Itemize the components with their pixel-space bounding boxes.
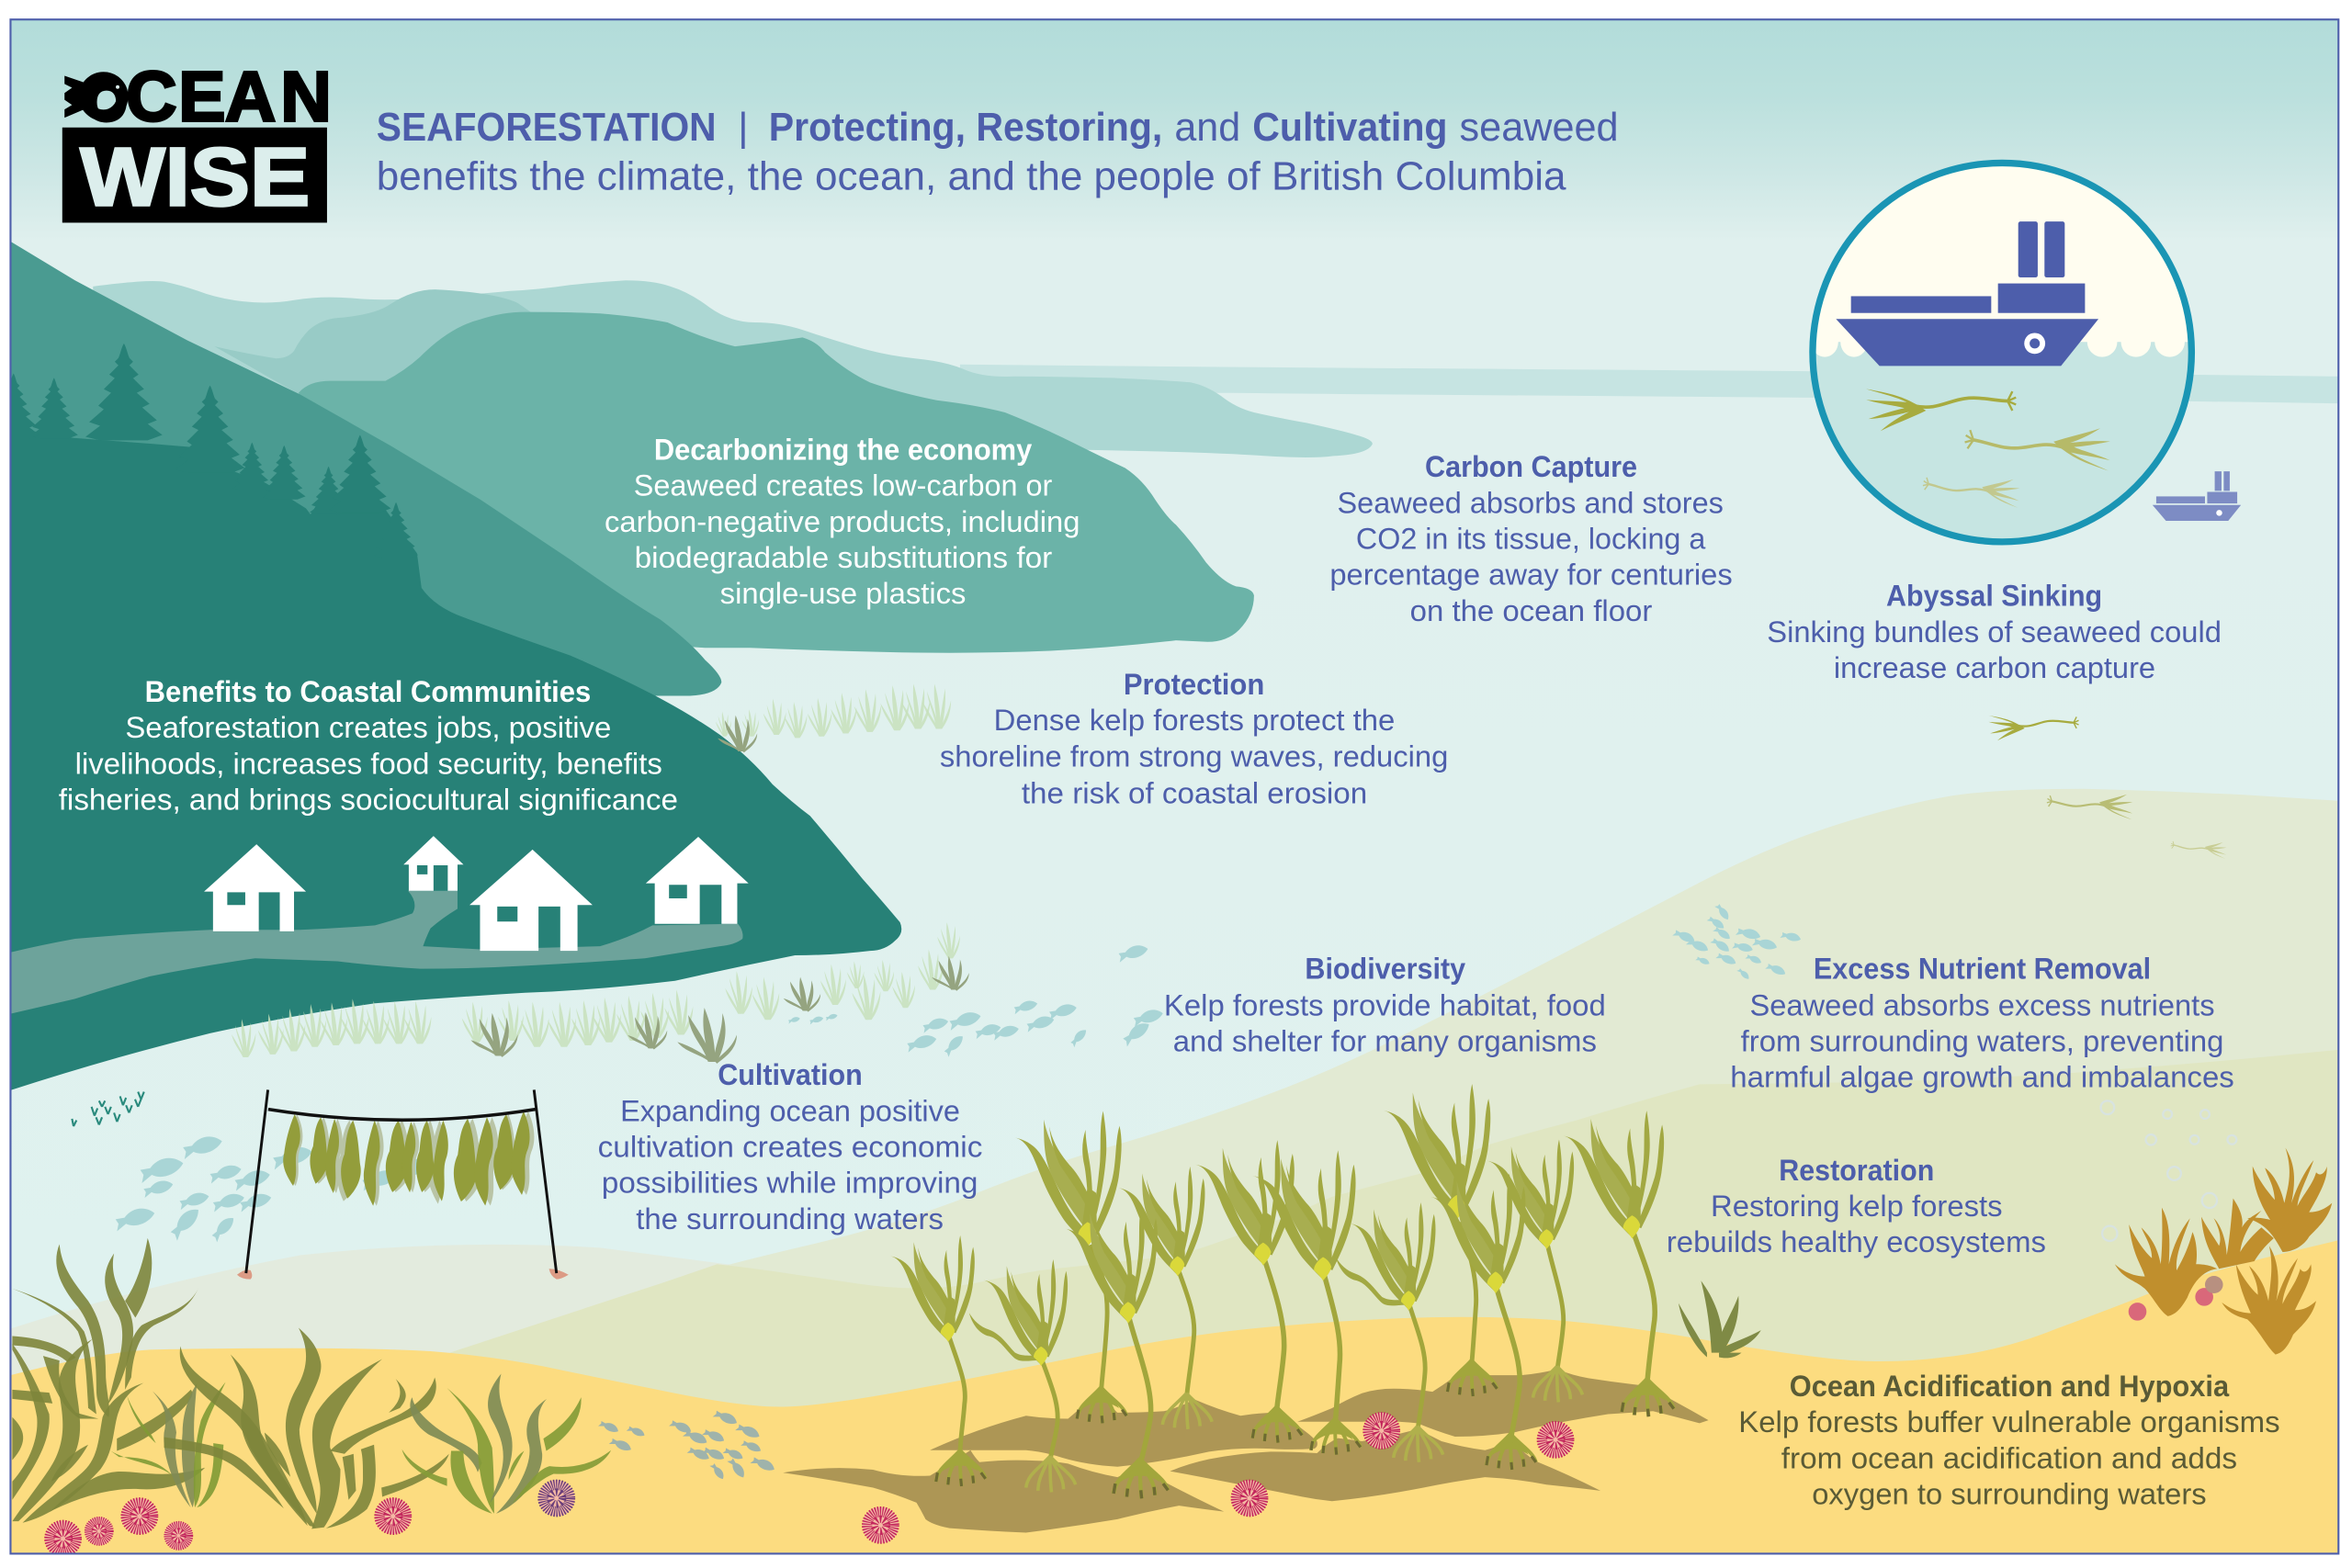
golden-brown seaweed cluster [2115,1148,2332,1355]
text: Protection: Dense kelp forests protect the [994,704,1395,737]
text: Abyssal Sinking: Abyssal Sinking [1886,580,2102,613]
distant water band [960,365,2338,403]
fish school near excess nutrient removal [1672,902,1802,982]
front kelp row [890,1111,1674,1498]
title: Cultivating [1252,106,1448,150]
abyssal sinking lens [1800,163,2205,552]
seaweed cultivation long line [237,1089,569,1280]
logo word OCEAN: OCEAN [85,59,332,137]
pale seabed hill [11,1245,729,1375]
left mid-tone mountain [10,242,721,705]
logo box WISE: WISE [80,132,310,224]
house two [403,836,464,891]
text: Benefits to Coastal Communities [59,675,678,817]
text: Abyssal Sinking: increase carbon capture [1834,651,2155,684]
back kelp row [1014,1084,1582,1429]
title: | [738,106,749,150]
right eelgrass clump [401,1373,611,1514]
text: Biodiversity: Kelp forests provide habitat, food [1164,988,1606,1021]
title: seaweed [1460,106,1619,150]
fish school near cultivation line [116,1136,429,1243]
text: Restoration [1667,1154,2046,1258]
text: Decarbonizing the economy: Decarbonizing the economy [654,433,1032,466]
large eelgrass clump [164,1328,449,1529]
house one [204,844,306,931]
dark green foreground shore [0,344,901,1090]
title: benefits the climate, the ocean, and the people of British Columbia [377,155,1566,199]
grey-green algae tufts [470,716,969,1064]
text: Excess Nutrient Removal: harmful algae growth and imbalances [1730,1061,2234,1094]
text: Cultivation: cultivation creates economic [598,1131,982,1164]
logo fish ring and tail [64,75,122,118]
text: Excess Nutrient Removal: Seaweed absorbs excess nutrients [1749,988,2215,1021]
small green eelgrass clump [111,1382,226,1507]
text: Restoration: Restoration [1779,1154,1934,1187]
kelp forest [890,1084,1674,1498]
tiny teal sprouts [72,1092,144,1126]
text: Biodiversity: Biodiversity [1305,952,1465,985]
text: Biodiversity: and shelter for many organisms [1173,1024,1597,1057]
fish school over sand [598,1411,775,1479]
text: Restoration: Restoring kelp forests [1711,1190,2003,1223]
text: Cultivation: Expanding ocean positive [620,1094,960,1127]
text: Decarbonizing the economy: biodegradable substitutions for [635,541,1053,574]
title: and [1174,106,1240,150]
sandy sea floor [10,1240,2338,1553]
eelgrass meadow left [12,1238,611,1529]
small reef urchins [2129,1276,2223,1321]
text: Cultivation [598,1058,982,1235]
text: Ocean Acidification and Hypoxia [1738,1370,2280,1511]
text: Benefits to Coastal Communities: Seaforestation creates jobs, positive [125,711,611,744]
house four [646,837,749,924]
text: Excess Nutrient Removal [1730,952,2234,1094]
text: Decarbonizing the economy: carbon-negative products, including [605,505,1080,538]
text: Biodiversity [1164,952,1606,1057]
houses [204,836,749,951]
title [377,106,1619,199]
text: Ocean Acidification and Hypoxia: Kelp forests buffer vulnerable organisms [1738,1405,2280,1438]
text: Excess Nutrient Removal: from surrounding waters, preventing [1741,1024,2223,1057]
text: Excess Nutrient Removal: Excess Nutrient Removal [1814,952,2151,985]
rocky reef patches [783,1363,1709,1533]
text: Benefits to Coastal Communities: Benefits to Coastal Communities [145,675,591,708]
fish school mid water [788,945,1163,1057]
drifting kelp outside lens [1989,716,2228,859]
sea urchins [45,1413,1574,1557]
olive seabed hill [728,788,2337,1288]
forest of conifer trees [0,344,418,558]
house three [469,850,593,951]
text: Protection [940,668,1448,809]
text: Protection: the risk of coastal erosion [1022,776,1367,809]
text: Carbon Capture [1329,450,1733,627]
text: Cultivation: possibilities while improving [602,1167,978,1200]
text: Carbon Capture: Seaweed absorbs and stores [1338,486,1724,519]
text: Protection: shoreline from strong waves, reducing [940,739,1448,773]
small eelgrass by restoration [1679,1280,1761,1358]
title: SEAFORESTATION [377,106,717,150]
village road [10,891,743,1014]
far mountain range [93,280,1373,457]
text: Decarbonizing the economy: Seaweed creates low-carbon or [634,469,1053,502]
text: Carbon Capture: Carbon Capture [1425,450,1637,483]
distant pale sea grass tufts [232,683,960,1057]
text: Ocean Acidification and Hypoxia: from ocean acidification and adds [1781,1441,2237,1474]
middle mountain [215,289,530,394]
text: Decarbonizing the economy: single-use plastics [720,577,966,610]
text: Abyssal Sinking: Sinking bundles of seaweed could [1767,615,2222,649]
text: Ocean Acidification and Hypoxia: Ocean Acidification and Hypoxia [1790,1370,2229,1403]
ship illustration [1836,221,2098,366]
text: Carbon Capture: CO2 in its tissue, locking a [1356,523,1706,556]
small ship icon [2153,471,2241,521]
text: Cultivation: the surrounding waters [636,1202,944,1235]
text: Abyssal Sinking [1767,580,2222,684]
text: Benefits to Coastal Communities: livelihoods, increases food security, benefits [75,747,662,780]
text: Benefits to Coastal Communities: fisheries, and brings sociocultural significance [59,784,678,817]
text: Cultivation: Cultivation [718,1058,863,1091]
text: Carbon Capture: percentage away for centuries [1329,558,1733,592]
logo: Ocean Wise [62,59,332,224]
text: Protection: Protection [1124,668,1264,701]
text: Decarbonizing the economy [605,433,1080,610]
text: Ocean Acidification and Hypoxia: oxygen to surrounding waters [1812,1478,2207,1511]
drifting kelp bundles [1866,389,2114,508]
front headland [299,312,1254,653]
text: Restoration: rebuilds healthy ecosystems [1667,1225,2046,1258]
title: Protecting, Restoring, [769,106,1162,150]
bubbles [2101,1100,2236,1241]
text: Carbon Capture: on the ocean floor [1410,594,1653,627]
deeper seabed hill [450,1050,2337,1407]
